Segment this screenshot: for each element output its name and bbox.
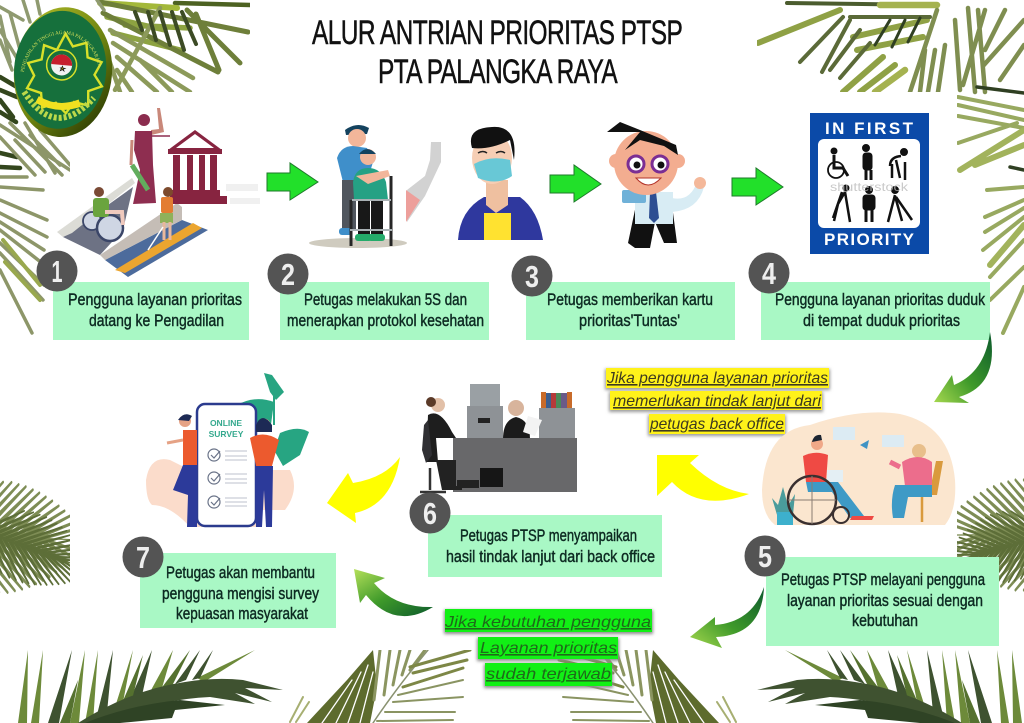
box [140, 553, 336, 628]
title [312, 14, 683, 91]
palm frond: bottom left [18, 650, 283, 723]
text: layanan prioritas sesuai dengan [787, 591, 983, 610]
note: yellow highlighted condition: Jika pengguna layanan prioritas [606, 370, 828, 387]
badge [744, 536, 786, 576]
box [428, 515, 662, 577]
illustration: step 6 office desk [420, 384, 577, 492]
pictograms [828, 144, 912, 222]
text [781, 570, 985, 630]
desk [453, 438, 577, 492]
illustration: step 7 online survey [146, 373, 309, 527]
figure: visually impaired pedestrian [148, 187, 173, 250]
note: yellow highlighted condition: memerlukan tindak lanjut dari [613, 393, 821, 410]
text [547, 290, 713, 330]
text: pengguna mengisi survey [162, 584, 319, 603]
text [162, 563, 319, 623]
badge: 5 [758, 539, 772, 574]
box [280, 282, 489, 340]
box [53, 282, 249, 340]
figure: wheelchair user [83, 187, 123, 241]
text: kepuasan masyarakat [176, 604, 308, 623]
badge: 3 [525, 259, 539, 294]
step 6 [410, 492, 662, 577]
step 3 [512, 256, 735, 340]
badge [748, 252, 790, 294]
palm frond: bottom centre right [556, 650, 736, 723]
blob [146, 459, 294, 527]
illustration: step 3 officer with card [607, 122, 706, 248]
figure: wheelchair user [788, 435, 874, 524]
arrow: 1 to 2 [267, 163, 318, 200]
leaves [237, 373, 309, 466]
title: PTA PALANGKA RAYA [378, 53, 618, 91]
step 5 [744, 536, 999, 646]
box [526, 282, 735, 340]
ground and ramps [57, 178, 208, 277]
plant [772, 487, 795, 525]
title: ALUR ANTRIAN PRIORITAS PTSP [312, 14, 683, 52]
text [68, 290, 242, 330]
text: Pengguna layanan prioritas [68, 290, 242, 309]
figure: woman at desk [420, 397, 462, 492]
text: menerapkan protokol kesehatan [287, 311, 484, 330]
text [287, 290, 484, 330]
note: green highlighted condition: Layanan prioritas [480, 640, 617, 657]
palm frond: small top centre [684, 2, 700, 18]
illustration: step 5 service conversation [762, 412, 955, 525]
palm frond: top left [0, 0, 250, 333]
text: Petugas melakukan 5S dan [304, 290, 467, 309]
step 2 [268, 254, 489, 340]
faint watermark smudge [226, 184, 260, 204]
arrow: 5 to green note [690, 587, 764, 648]
icon: priority sign: IN FIRST [825, 119, 914, 138]
box [766, 557, 999, 646]
palm frond: bottom centre left [290, 650, 470, 723]
text: hasil tindak lanjut dari back office [446, 547, 655, 566]
arrow: 2 to 3 [550, 165, 601, 202]
badge [122, 536, 164, 578]
arrow: 3 to 4 [732, 168, 783, 205]
text [446, 526, 655, 566]
speech bubbles [833, 427, 904, 447]
palm frond: middle left [0, 480, 102, 603]
note: green highlighted condition: sudah terjawab [486, 666, 611, 683]
phone: ONLINE [210, 418, 242, 428]
phone [197, 404, 256, 526]
note: yellow highlighted condition: petugas back office [649, 416, 784, 433]
figure: caregiver [337, 125, 373, 235]
shelf and books [539, 392, 575, 439]
text: kebutuhan [852, 611, 918, 630]
text: Petugas memberikan kartu [547, 290, 713, 309]
illustration: step 2 caregiver and wheelchair [309, 125, 441, 248]
smoke fragment [407, 142, 441, 222]
step 4 [748, 252, 990, 340]
figure: woman with phone [250, 418, 279, 527]
badge: 2 [281, 257, 295, 292]
text: prioritas'Tuntas' [579, 311, 680, 330]
note: green highlighted condition [444, 609, 653, 688]
icon: priority sign [810, 113, 929, 254]
icon: priority sign: PRIORITY [824, 230, 915, 249]
box [761, 282, 990, 340]
figure: man with phone [167, 414, 197, 527]
text: datang ke Pengadilan [89, 311, 224, 330]
badge [36, 250, 78, 292]
badge: 1 [52, 254, 62, 289]
palm frond: middle right [939, 480, 1024, 596]
text: di tempat duduk prioritas [803, 311, 960, 330]
text [775, 290, 985, 330]
palm frond: top right [758, 3, 1024, 333]
figure: wheelchair user [350, 149, 392, 246]
illustration: man wearing mask [458, 127, 543, 240]
badge: 4 [762, 256, 777, 291]
briefcase [480, 468, 503, 487]
phone: SURVEY [209, 429, 244, 439]
note: green highlighted condition: Jika kebutuhan pengguna [444, 614, 651, 631]
badge [410, 492, 450, 534]
illustration: step 1 court access [57, 108, 260, 277]
badge: 7 [136, 540, 150, 575]
figure: man with paper [503, 400, 542, 439]
logo: court emblem [14, 7, 112, 137]
figure: statue of justice [131, 108, 170, 204]
arrow: 4 to 5 [934, 332, 992, 403]
text: Petugas akan membantu [166, 563, 315, 582]
badge [268, 254, 308, 294]
step 7 [122, 536, 336, 628]
arrow: 5 to 6 (yellow) [657, 455, 749, 501]
arrow: green note to 7 [354, 569, 433, 616]
badge [512, 256, 552, 296]
cabinet [467, 384, 503, 438]
arrow: 6 to 7 (yellow) [327, 457, 400, 523]
step 1 [36, 250, 249, 340]
note: yellow highlighted condition [605, 368, 830, 436]
figure: woman on chair [890, 444, 943, 522]
text: Petugas PTSP menyampaikan [460, 526, 637, 545]
figure: court building [168, 130, 227, 204]
badge: 6 [423, 496, 437, 531]
palm frond: bottom right [757, 650, 1022, 723]
logo: court emblem: PENGADILAN TINGGI AGAMA PALANGKARAYA [20, 30, 102, 72]
watermark: shutterstock [830, 180, 909, 194]
